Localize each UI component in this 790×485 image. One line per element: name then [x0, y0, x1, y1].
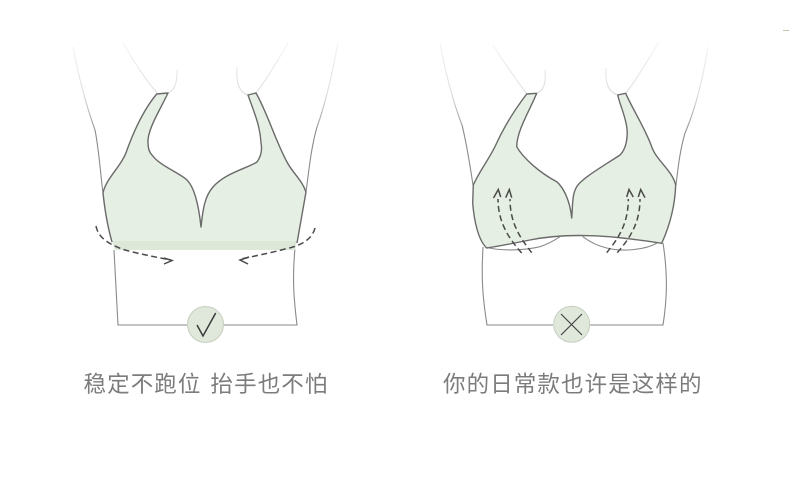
- caption: raise hands: 抬手也不怕: [210, 372, 329, 397]
- caption: everyday style: 你的日常款也许是这样的: [443, 372, 703, 397]
- small top-right mark: [783, 30, 789, 31]
- arrow: left band dashed arrow: [96, 226, 172, 264]
- garment: stable bra: [103, 93, 306, 250]
- panel: correct fit figure: [73, 43, 338, 342]
- body outline: left figure: [73, 43, 338, 325]
- garment: riding-up bra: [473, 93, 676, 248]
- caption: stable: 稳定不跑位: [84, 372, 202, 397]
- arrow: right band dashed arrow: [240, 228, 315, 264]
- body outline: right figure: [440, 43, 708, 325]
- underwire curves: [485, 237, 657, 250]
- icon: cross badge: [554, 306, 590, 342]
- arrows: left rising dashes: [494, 190, 532, 253]
- panel: poor fit figure: [440, 43, 708, 342]
- arrows: right rising dashes: [607, 190, 645, 253]
- icon: check badge: [188, 306, 224, 342]
